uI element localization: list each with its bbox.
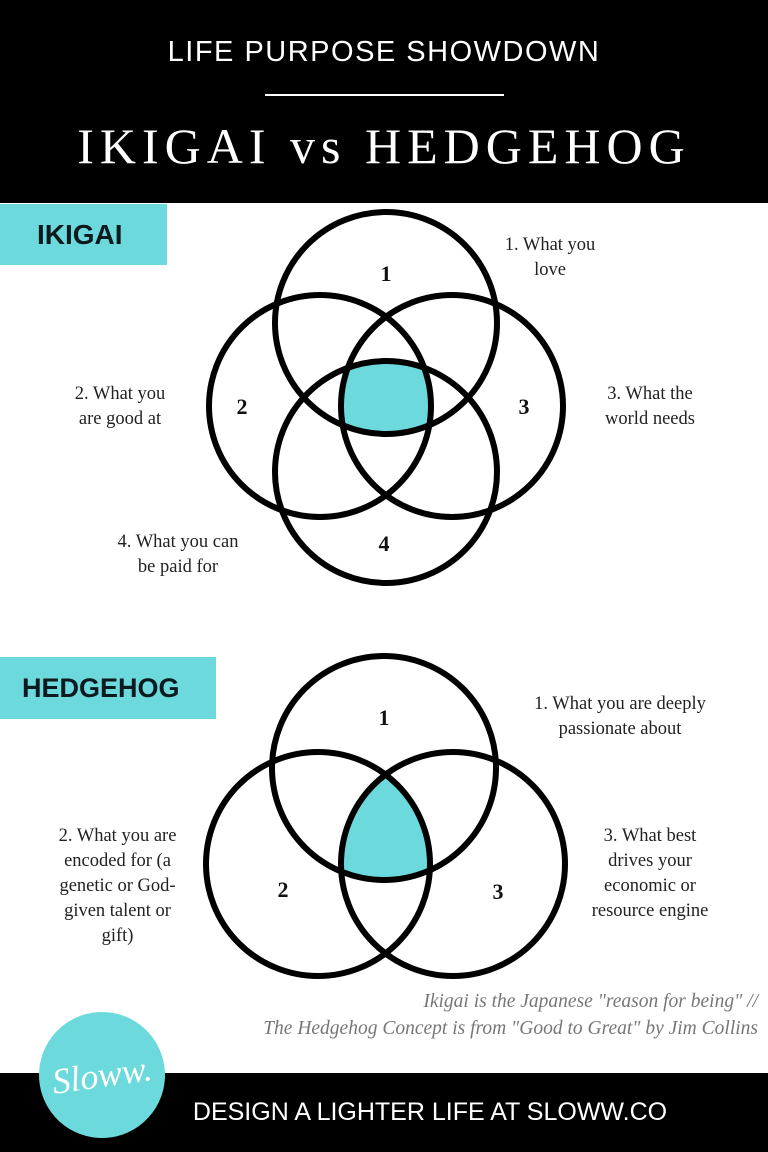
hedgehog labels xyxy=(534,694,706,739)
hedgehog labels: passionate about xyxy=(559,719,681,739)
ikigai venn diagram xyxy=(206,209,566,586)
footer text: DESIGN A LIGHTER LIFE AT SLOWW.CO xyxy=(193,1098,667,1126)
hedgehog venn diagram: 3 xyxy=(492,879,504,904)
footnote: Ikigai is the Japanese "reason for being" // xyxy=(423,991,758,1012)
ikigai venn diagram: 2 xyxy=(236,394,248,419)
ikigai labels xyxy=(505,235,595,280)
text: economic or xyxy=(604,876,696,896)
header band xyxy=(0,0,768,203)
hedgehog venn diagram: 1 xyxy=(378,705,390,730)
text: 2. What you are xyxy=(59,826,176,846)
text: be paid for xyxy=(138,557,218,577)
text: 2. What you xyxy=(75,384,165,404)
footnote xyxy=(263,991,760,1039)
logo: sloww xyxy=(31,1004,173,1146)
text: drives your xyxy=(608,851,692,871)
text: 3. What best xyxy=(604,826,696,846)
label: HEDGEHOG: HEDGEHOG xyxy=(22,673,180,703)
footnote: The Hedgehog Concept is from "Good to Great" by Jim Collins xyxy=(263,1018,758,1039)
ikigai venn diagram: 1 xyxy=(380,261,392,286)
text: 3. What the xyxy=(607,384,693,404)
text: gift) xyxy=(102,926,133,946)
ikigai venn diagram: 4 xyxy=(378,531,390,556)
label: HEDGEHOG xyxy=(0,657,216,719)
footer band xyxy=(0,1073,768,1152)
subtitle: LIFE PURPOSE SHOWDOWN xyxy=(168,36,600,68)
main title: IKIGAI vs HEDGEHOG xyxy=(77,118,691,174)
hedgehog venn diagram: 2 xyxy=(278,877,288,902)
label: IKIGAI: IKIGAI xyxy=(37,219,123,250)
text: world needs xyxy=(605,409,695,429)
logo: sloww: Sloww. xyxy=(50,1048,154,1102)
label: IKIGAI xyxy=(0,204,167,265)
hedgehog venn diagram xyxy=(203,653,568,979)
text: resource engine xyxy=(592,901,708,921)
ikigai venn diagram: 3 xyxy=(518,394,530,419)
text: encoded for (a xyxy=(64,851,171,871)
text: given talent or xyxy=(64,901,171,921)
text: are good at xyxy=(79,409,161,429)
hedgehog labels: 1. What you are deeply xyxy=(534,694,706,714)
ikigai labels: 1. What you xyxy=(505,235,595,255)
ikigai labels: love xyxy=(534,260,566,280)
text: 4. What you can xyxy=(118,532,238,552)
text: genetic or God- xyxy=(59,876,176,896)
